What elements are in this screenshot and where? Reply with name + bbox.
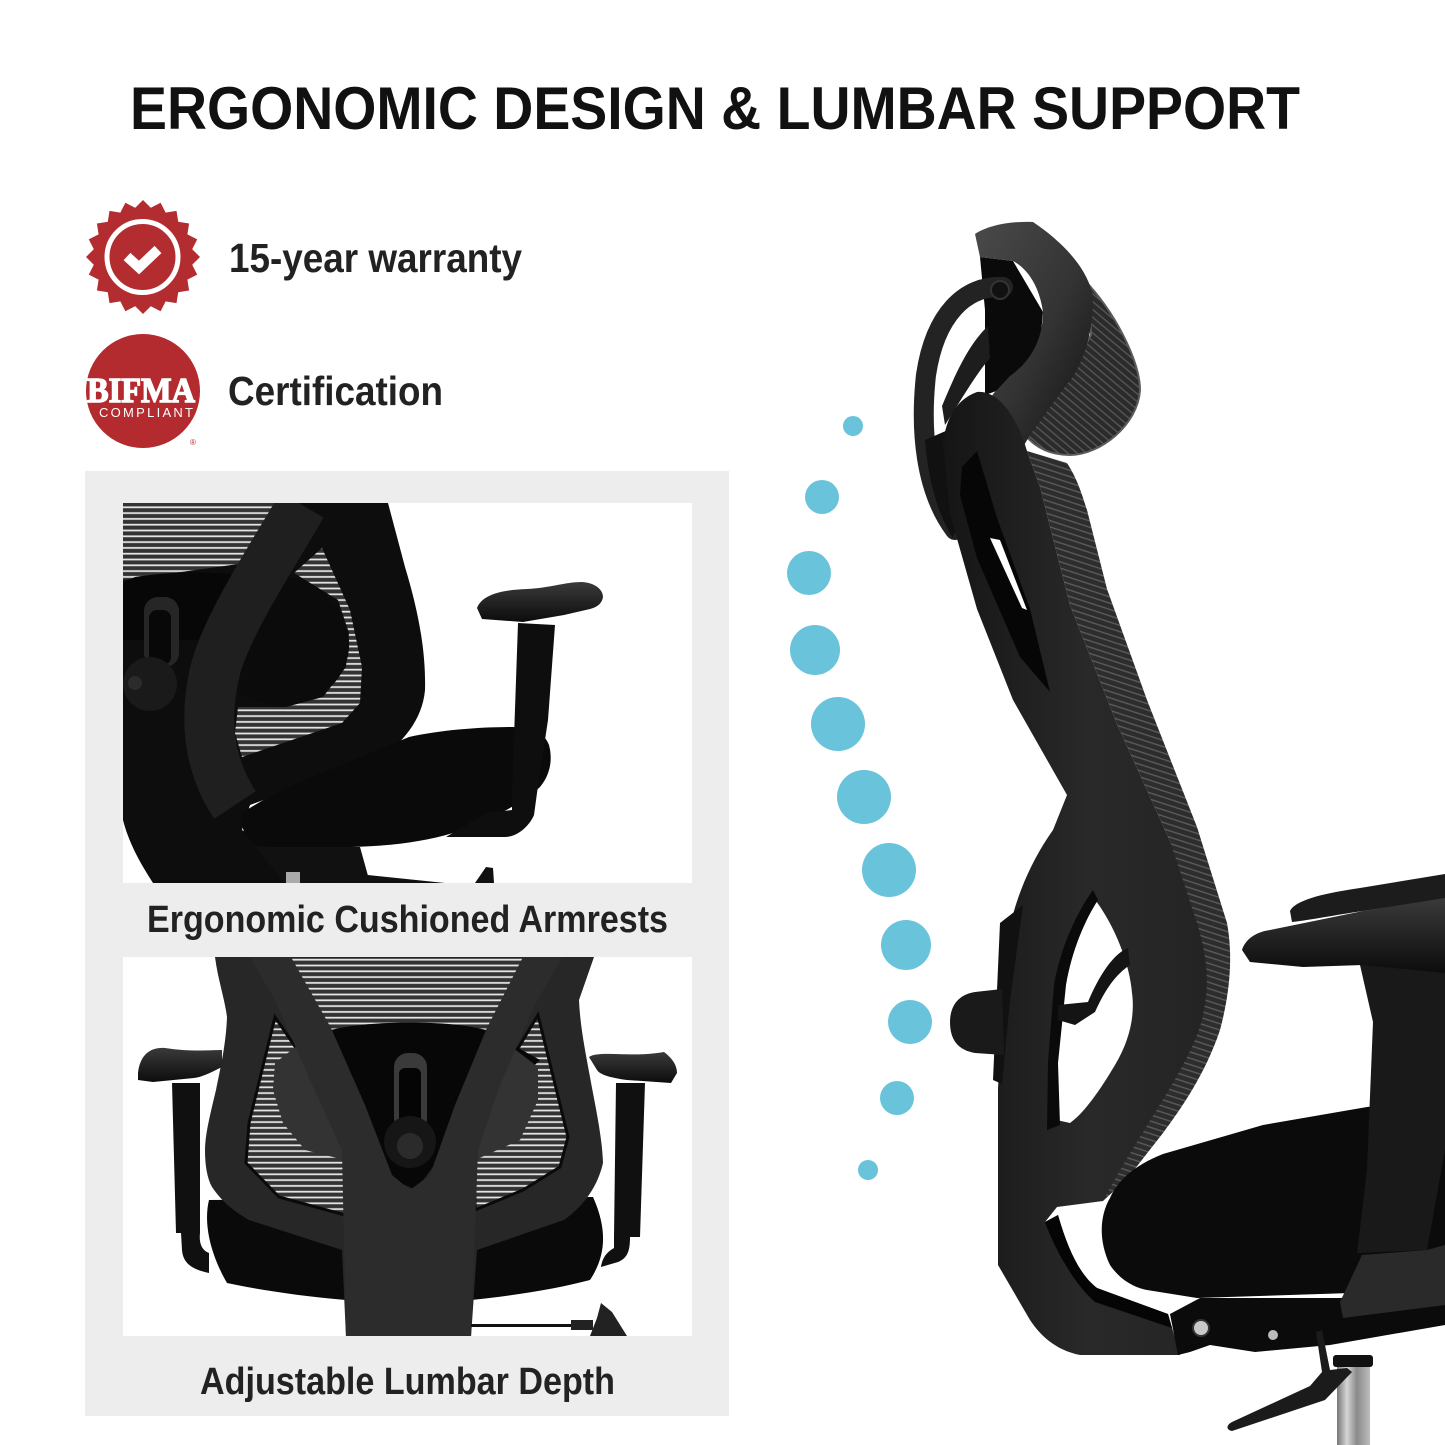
chair side view	[924, 222, 1445, 1445]
headrest mesh	[1025, 285, 1140, 455]
left lumbar pad	[273, 1045, 345, 1160]
headrest shell	[975, 222, 1093, 447]
arm support	[1357, 965, 1445, 1253]
seat cushion	[1102, 1098, 1445, 1298]
arm mount	[1340, 1245, 1445, 1318]
backrest frame	[123, 503, 425, 883]
photo: adjustable lumbar depth	[123, 957, 692, 1337]
right mesh window	[475, 1015, 568, 1210]
icon: BIFMA compliant seal	[86, 334, 200, 448]
lumbar knob	[950, 905, 1023, 1084]
base and lever	[255, 847, 494, 883]
right arm	[589, 1052, 677, 1267]
panel: feature photos	[85, 471, 729, 1416]
spine curve dots	[787, 416, 932, 1180]
certification label: Certification	[228, 368, 443, 414]
lumbar bracket	[1047, 890, 1130, 1130]
title: ERGONOMIC DESIGN & LUMBAR SUPPORT	[130, 75, 1300, 142]
side mesh window	[235, 548, 362, 757]
back mesh upper	[123, 503, 274, 580]
seat mechanism	[1170, 1296, 1445, 1367]
backrest frame	[943, 392, 1207, 1355]
warranty label: 15-year warranty	[229, 235, 522, 281]
top mesh	[291, 958, 523, 1030]
headrest bracket	[924, 257, 1043, 538]
left arm	[138, 1048, 222, 1273]
upper frame opening	[960, 451, 1050, 692]
frame arc	[209, 505, 302, 805]
label: lumbar depth: Adjustable Lumbar Depth	[200, 1361, 615, 1403]
arm support	[446, 623, 555, 837]
icon: warranty badge	[86, 200, 200, 314]
backrest mesh edge	[1027, 451, 1230, 1201]
photo: ergonomic cushioned armrests	[123, 503, 692, 883]
label: armrests: Ergonomic Cushioned Armrests	[147, 899, 668, 941]
back frame	[205, 957, 603, 1337]
lumbar knob	[384, 1053, 436, 1168]
far arm pad	[1290, 874, 1445, 922]
right lumbar pad	[475, 1047, 538, 1160]
foot inner band	[1045, 1215, 1172, 1328]
lumbar window	[1052, 897, 1133, 1123]
height lever	[1228, 1330, 1352, 1431]
lumbar knob	[123, 597, 179, 711]
seat cushion	[242, 727, 551, 847]
near arm pad	[1242, 898, 1445, 973]
centre recess	[332, 1022, 540, 1188]
icon: BIFMA compliant seal: ®	[190, 438, 196, 447]
left mesh window	[246, 1017, 345, 1215]
seat cushion	[207, 1197, 603, 1300]
Y frame	[292, 958, 523, 1336]
base lever	[471, 1303, 627, 1336]
gas cylinder	[1337, 1365, 1370, 1445]
icon: BIFMA compliant seal: BIFMA	[87, 371, 196, 410]
icon: BIFMA compliant seal: COMPLIANT	[99, 405, 193, 420]
arm pad	[477, 582, 603, 622]
lumbar pad	[298, 638, 350, 704]
